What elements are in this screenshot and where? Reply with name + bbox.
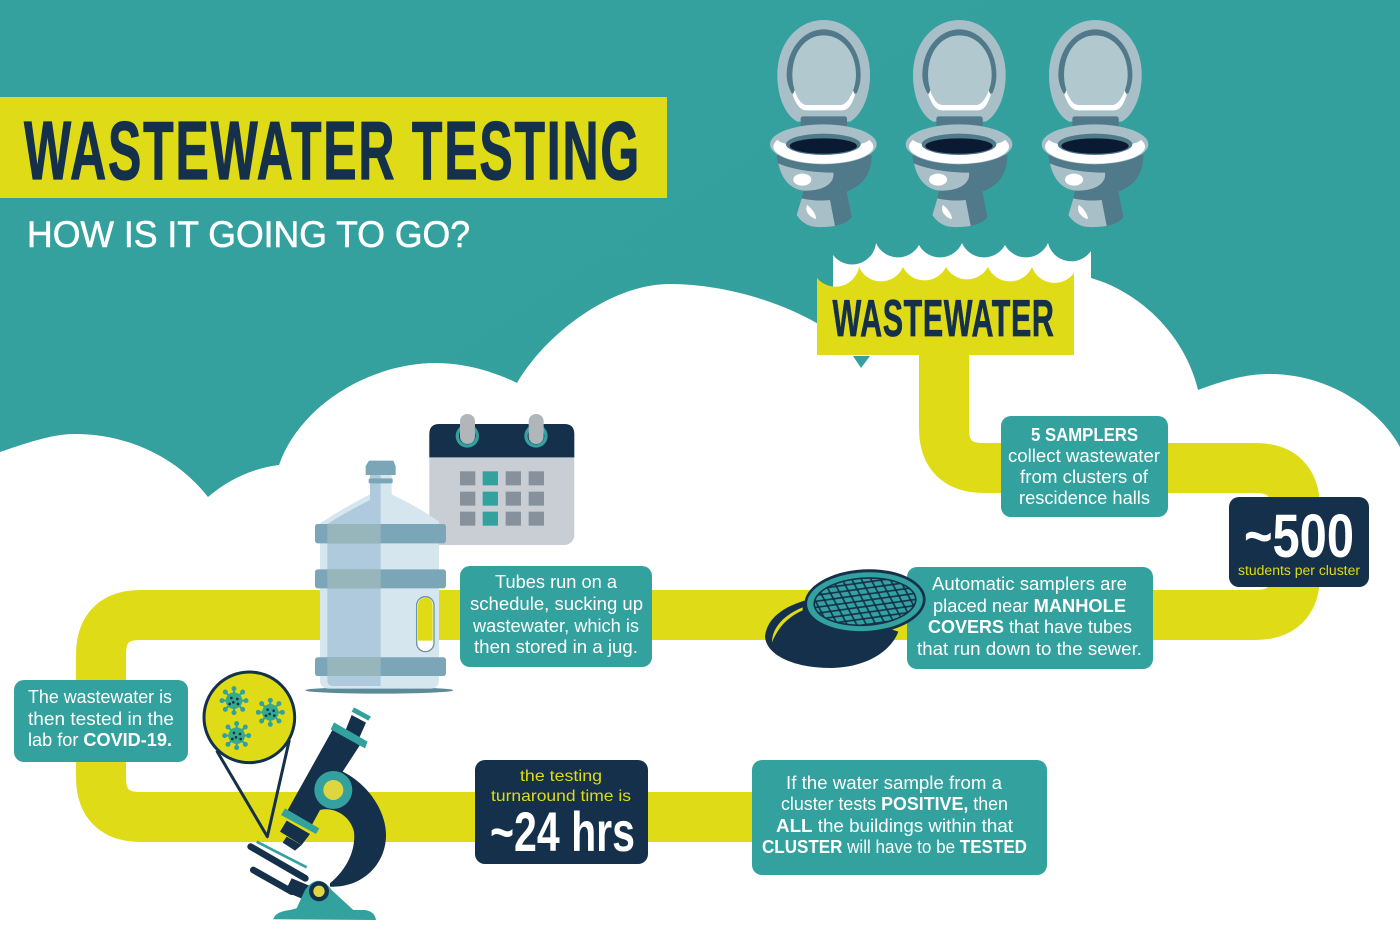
callout: manhole covers bbox=[907, 567, 1153, 669]
callout: positive result: cluster tests POSITIVE, then bbox=[781, 794, 1008, 814]
icon: microscope with magnified virus bbox=[204, 672, 386, 920]
title: WASTEWATER TESTING bbox=[24, 104, 641, 197]
icon: three toilets bbox=[770, 20, 1148, 227]
callout: positive result: ALL the buildings within that bbox=[776, 816, 1013, 836]
callout: lab testing: lab for COVID-19. bbox=[28, 730, 172, 750]
callout: 5 samplers bbox=[1001, 416, 1168, 517]
wastewater sign bbox=[817, 243, 1091, 368]
wastewater sign: WASTEWATER bbox=[832, 290, 1054, 348]
callout: turnaround time: the testing bbox=[520, 768, 602, 785]
white cloud bbox=[0, 278, 1400, 933]
magnified virus view bbox=[204, 672, 295, 763]
callout: tubes and jug bbox=[460, 566, 652, 667]
callout: 5 samplers: rescidence halls bbox=[1019, 488, 1150, 508]
callout: 500 students per cluster: ~500 bbox=[1244, 502, 1354, 570]
callout: lab testing bbox=[14, 680, 188, 762]
icon: manhole cover bbox=[765, 566, 927, 668]
callout: tubes and jug: then stored in a jug. bbox=[474, 637, 638, 657]
icon: water jug bbox=[305, 461, 453, 694]
callout: manhole covers: Automatic samplers are bbox=[932, 574, 1127, 594]
callout: 500 students per cluster: students per cluster bbox=[1238, 563, 1361, 578]
callout: tubes and jug: schedule, sucking up bbox=[470, 594, 643, 614]
callout: turnaround time bbox=[475, 760, 648, 864]
callout: tubes and jug: wastewater, which is bbox=[472, 616, 639, 636]
callout: tubes and jug: Tubes run on a bbox=[495, 572, 618, 592]
callout: lab testing: The wastewater is bbox=[28, 687, 172, 707]
icon: calendar bbox=[429, 414, 574, 545]
callout: positive result bbox=[752, 760, 1047, 875]
magnifier cone bbox=[217, 740, 289, 837]
callout: 5 samplers: 5 SAMPLERS bbox=[1031, 425, 1138, 445]
callout: lab testing: then tested in the bbox=[28, 709, 174, 729]
callout: manhole covers: that run down to the sewer. bbox=[917, 639, 1142, 659]
pipe bbox=[101, 350, 1295, 817]
title banner bbox=[0, 97, 667, 198]
callout: 5 samplers: collect wastewater bbox=[1008, 446, 1160, 466]
subtitle: HOW IS IT GOING TO GO? bbox=[27, 214, 470, 255]
callout: 500 students per cluster bbox=[1229, 497, 1369, 587]
callout: positive result: If the water sample from a bbox=[786, 773, 1003, 793]
callout: manhole covers: placed near MANHOLE bbox=[933, 596, 1126, 616]
callout: 5 samplers: from clusters of bbox=[1020, 467, 1149, 487]
callout: positive result: CLUSTER will have to be TESTED bbox=[762, 837, 1027, 857]
callout: turnaround time: ~24 hrs bbox=[490, 800, 635, 863]
callout: turnaround time: turnaround time is bbox=[491, 788, 631, 805]
microscope body bbox=[251, 707, 386, 920]
callout: manhole covers: COVERS that have tubes bbox=[928, 617, 1132, 637]
